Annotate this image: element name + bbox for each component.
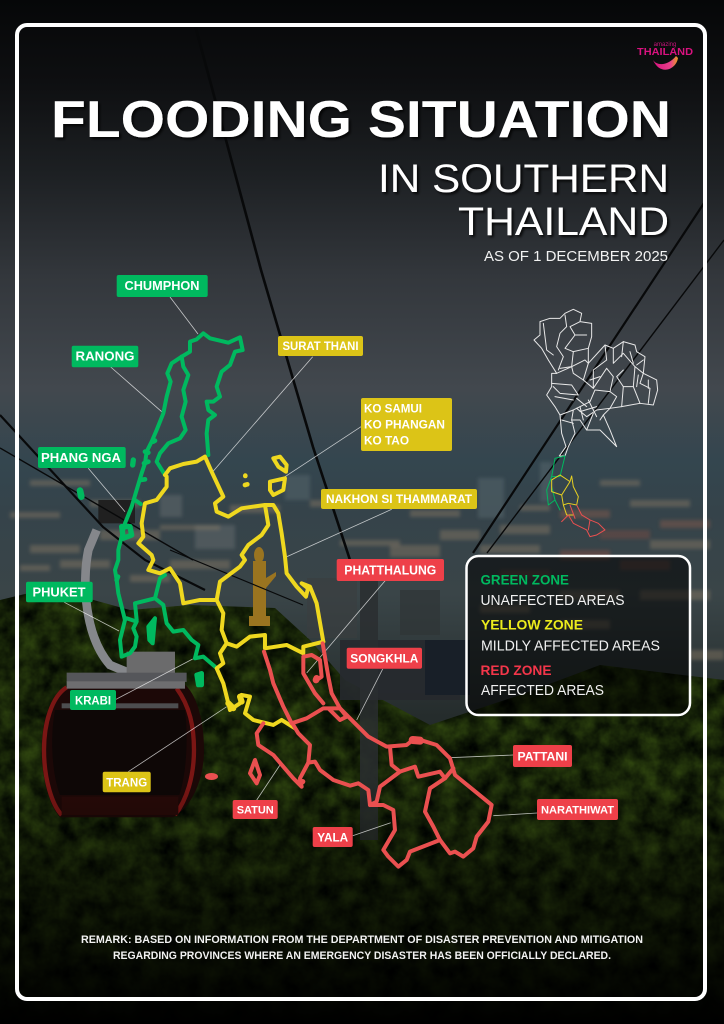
legend panel xyxy=(466,556,690,715)
label: Satun: SATUN xyxy=(237,804,274,816)
label: Phuket: PHUKET xyxy=(32,586,86,600)
legend: red zone: AFFECTED AREAS xyxy=(481,683,604,699)
label: Nakhon Si Thammarat xyxy=(321,489,477,509)
label: Trang: TRANG xyxy=(106,776,147,790)
label: Satun xyxy=(233,800,278,819)
label: Phatthalung: PHATTHALUNG xyxy=(344,564,436,578)
legend: yellow zone: YELLOW ZONE xyxy=(481,617,583,633)
background photo: station structures xyxy=(307,570,470,840)
label: Yala xyxy=(313,827,353,847)
title: THAILAND xyxy=(458,200,669,244)
legend: yellow zone: MILDLY AFFECTED AREAS xyxy=(481,638,660,654)
label: Songkhla: SONGKHLA xyxy=(350,652,419,666)
label: Ko Samui, Ko Phangan, Ko Tao: KO PHANGAN xyxy=(364,420,445,432)
label: Krabi xyxy=(70,690,116,710)
inset south: yellow zone xyxy=(552,475,578,515)
label: Surat Thani xyxy=(278,336,363,356)
background photo: cable car gondola xyxy=(42,500,204,817)
inset map: whole of Thailand xyxy=(534,309,658,537)
background photo: golden Buddha statue xyxy=(249,547,276,626)
bottom darkening xyxy=(0,780,724,1024)
title: FLOODING SITUATION xyxy=(51,91,671,149)
inset south: red zone xyxy=(562,505,605,537)
label: Surat Thani: SURAT THANI xyxy=(282,341,358,353)
legend: green zone: UNAFFECTED AREAS xyxy=(480,593,624,609)
remark: REGARDING PROVINCES WHERE AN EMERGENCY DISASTER HAS BEEN OFFICIALLY DECLARED. xyxy=(113,950,611,962)
remark xyxy=(81,934,643,962)
background photo: cableway wires xyxy=(0,25,724,605)
yellow zone outlines xyxy=(138,457,323,728)
label: Pattani: PATTANI xyxy=(518,752,568,764)
label: Trang xyxy=(103,772,151,792)
label: Phatthalung xyxy=(337,559,444,581)
map: southern provinces xyxy=(80,333,492,867)
background photo: forest xyxy=(0,588,724,1024)
leader lines xyxy=(64,297,537,836)
inset outline and provinces xyxy=(534,309,658,456)
label: Nakhon Si Thammarat: NAKHON SI THAMMARAT xyxy=(326,494,472,506)
legend: green zone xyxy=(480,571,624,609)
label: Yala: YALA xyxy=(317,830,349,844)
logo: Amazing Thailand: THAILAND xyxy=(637,47,693,58)
logo: Amazing Thailand: amazing xyxy=(654,42,676,48)
label: Ko Samui, Ko Phangan, Ko Tao: KO SAMUI xyxy=(364,404,422,416)
label: Pattani xyxy=(513,745,572,767)
red island xyxy=(205,773,218,780)
remark: REMARK: BASED ON INFORMATION FROM THE DEPARTMENT OF DISASTER PREVENTION AND MITIGATION xyxy=(81,934,643,946)
green zone outlines xyxy=(80,333,243,685)
legend: green zone: GREEN ZONE xyxy=(480,571,569,587)
label: Songkhla xyxy=(347,648,422,669)
label: Ranong: RANONG xyxy=(76,350,134,364)
inset south: green zone xyxy=(547,456,565,510)
label: Phuket xyxy=(26,582,93,602)
background photo: hazy city xyxy=(10,462,724,660)
label: Ko Samui, Ko Phangan, Ko Tao: KO TAO xyxy=(364,436,409,448)
legend: red zone: RED ZONE xyxy=(480,662,552,678)
label: Phang Nga xyxy=(38,447,126,468)
label: Phang Nga: PHANG NGA xyxy=(41,451,121,465)
label: Ranong xyxy=(72,346,138,367)
label: Narathiwat xyxy=(537,799,618,820)
label: Ko Samui, Ko Phangan, Ko Tao xyxy=(361,398,452,451)
logo: Amazing Thailand xyxy=(637,42,693,70)
label: Chumphon xyxy=(117,275,208,297)
legend: yellow zone xyxy=(481,617,660,654)
title xyxy=(51,91,671,244)
red zone outlines xyxy=(250,643,492,867)
date line: AS OF 1 DECEMBER 2025 xyxy=(484,248,668,265)
label: Krabi: KRABI xyxy=(75,696,111,708)
title: IN SOUTHERN xyxy=(378,157,669,201)
label: Narathiwat: NARATHIWAT xyxy=(541,804,614,816)
label: Chumphon: CHUMPHON xyxy=(124,278,200,293)
legend: red zone xyxy=(480,662,604,699)
